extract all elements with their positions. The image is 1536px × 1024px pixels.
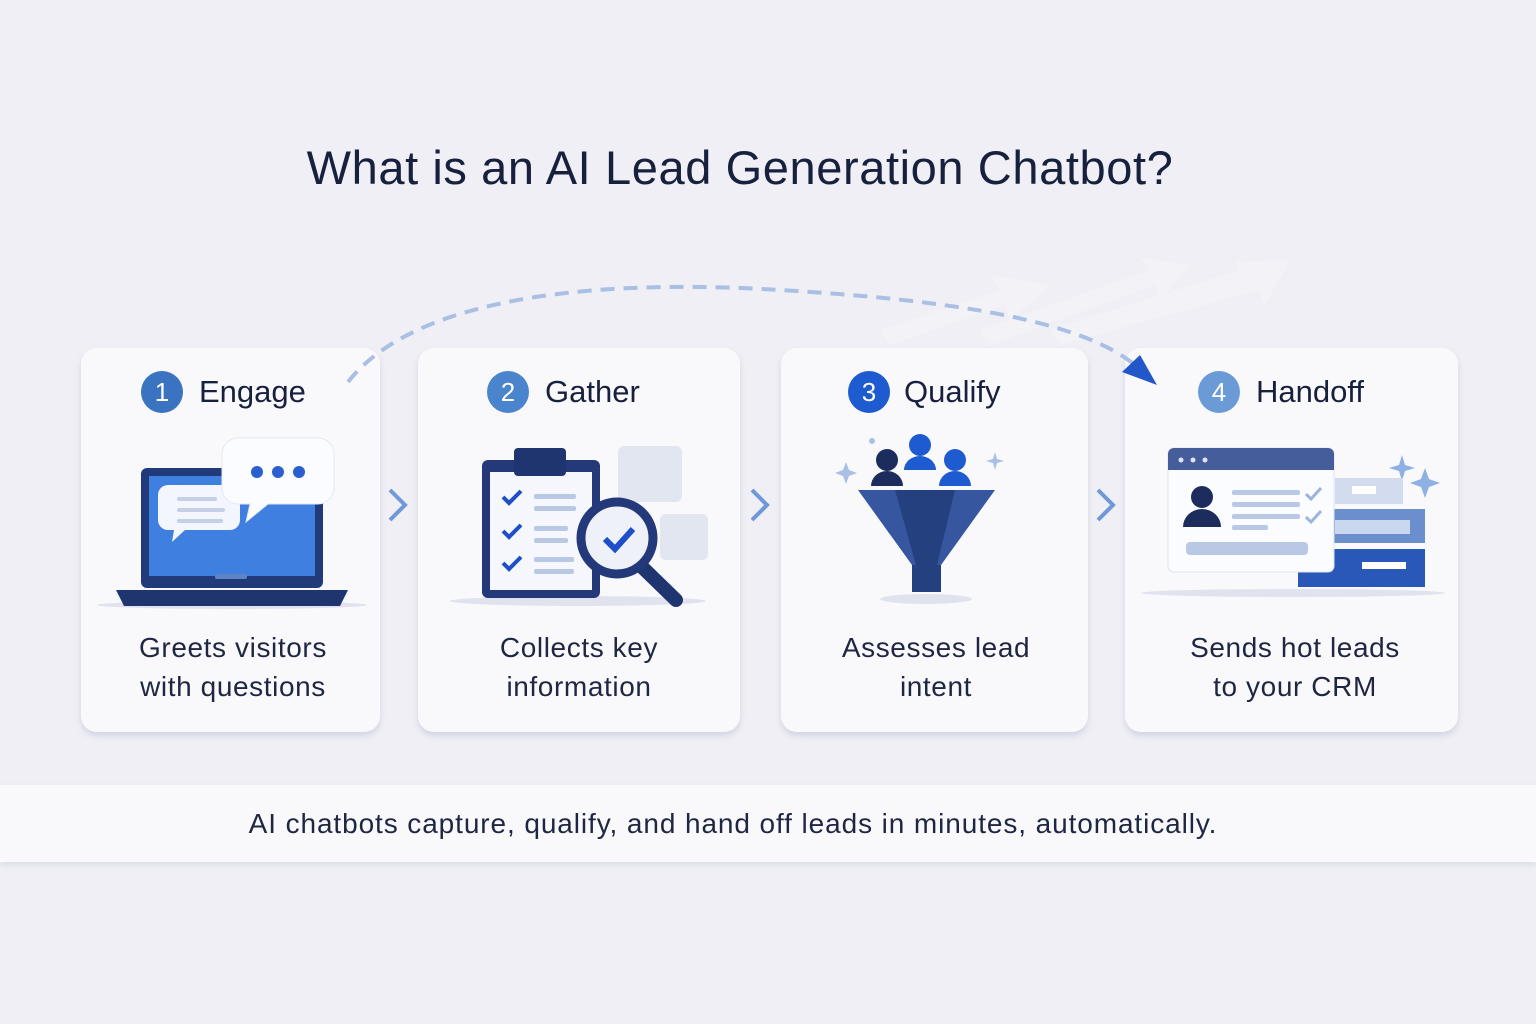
heading 4: 4 xyxy=(1212,376,1226,406)
description 2: Collects key xyxy=(500,632,658,663)
icon: CRM handoff xyxy=(1141,448,1445,597)
description 3: intent xyxy=(900,671,972,702)
description 3: Assesses lead xyxy=(842,632,1030,663)
heading 2 xyxy=(487,371,640,413)
heading 2: Gather xyxy=(545,374,640,409)
heading 3: 3 xyxy=(862,376,876,406)
card 1 xyxy=(81,348,380,732)
icon: laptop chat xyxy=(97,438,367,609)
heading 1 xyxy=(141,371,306,413)
card 4 xyxy=(1125,348,1458,732)
heading 3 xyxy=(848,371,1000,413)
heading 1: Engage xyxy=(199,374,306,409)
footer banner: AI chatbots capture, qualify, and hand off leads in minutes, automatically. xyxy=(249,808,1217,838)
description 4: Sends hot leads xyxy=(1190,632,1400,663)
heading 4 xyxy=(1198,371,1364,413)
title: What is an AI Lead Generation Chatbot? xyxy=(307,141,1173,194)
heading 2: 2 xyxy=(501,376,515,406)
heading 3: Qualify xyxy=(904,374,1000,409)
card 2 xyxy=(418,348,740,732)
description 4: to your CRM xyxy=(1213,671,1377,702)
footer banner xyxy=(0,785,1536,862)
description 1 xyxy=(139,632,327,702)
arrow chevrons xyxy=(390,490,1113,520)
description 3 xyxy=(842,632,1030,702)
icon: funnel with people xyxy=(835,434,1004,604)
description 2 xyxy=(500,632,658,702)
card 3 xyxy=(781,348,1088,732)
description 1: with questions xyxy=(140,671,326,702)
description 1: Greets visitors xyxy=(139,632,327,663)
heading 1: 1 xyxy=(155,376,169,406)
description 2: information xyxy=(506,671,652,702)
icon: clipboard magnifier xyxy=(450,446,708,606)
heading 4: Handoff xyxy=(1256,374,1364,409)
description 4 xyxy=(1190,632,1400,702)
